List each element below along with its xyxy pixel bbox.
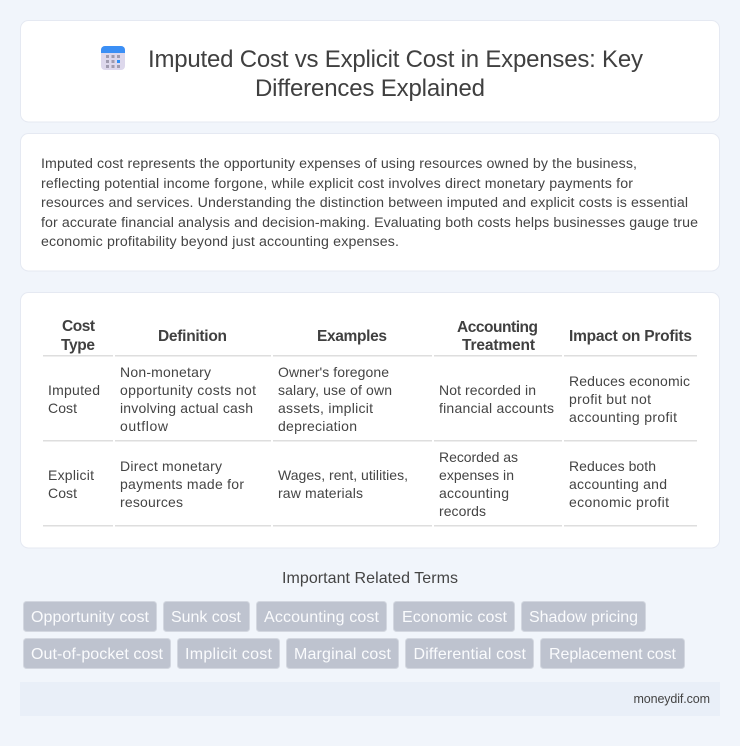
- panel: summary paragraph: [20, 134, 720, 271]
- text block: summary: economic profitability beyond just accounting expenses.: [41, 234, 399, 250]
- tag list: related terms: Sunk cost: [171, 609, 242, 626]
- table row: explicit cost: resources: [120, 494, 183, 510]
- heading: important related terms: Important Related Terms: [282, 570, 458, 587]
- table row: imputed cost: Owner's foregone: [278, 364, 389, 380]
- table header row: Examples: [317, 328, 387, 345]
- table row: imputed cost: profit but not: [569, 391, 651, 407]
- tag list: related terms: Accounting cost: [264, 609, 380, 626]
- table row: explicit cost: raw materials: [278, 485, 363, 501]
- table header row: Definition: [158, 328, 227, 345]
- table header row: [61, 318, 692, 354]
- title: Imputed Cost vs Explicit Cost in Expenses: Key: [148, 46, 643, 73]
- table row: explicit cost: accounting: [439, 485, 509, 501]
- title: [148, 46, 643, 102]
- table row: explicit cost: economic profit: [569, 494, 669, 510]
- table row: explicit cost: Reduces both: [569, 458, 656, 474]
- table row: imputed cost: accounting profit: [569, 409, 677, 425]
- table header row: Accounting: [457, 319, 538, 336]
- table header row: Type: [61, 337, 95, 354]
- table row: imputed cost: financial accounts: [439, 400, 554, 416]
- table row: imputed cost: Cost: [48, 400, 77, 416]
- text block: summary: resources and services. Understanding the distinction between imputed and explicit costs is essential: [41, 195, 688, 211]
- tag list: related terms: Out-of-pocket cost: [31, 646, 164, 663]
- tag list: related terms: Marginal cost: [294, 646, 392, 663]
- table row: explicit cost: Explicit: [48, 467, 94, 483]
- table row: explicit cost: accounting and: [569, 476, 667, 492]
- table row: imputed cost: involving actual cash: [120, 400, 253, 416]
- table row: imputed cost: Not recorded in: [439, 382, 536, 398]
- text block: summary: for accurate financial analysis and decision-making. Evaluating both costs helps businesses gauge true: [41, 215, 698, 231]
- text block: summary: reflecting potential income forgone, while explicit cost involves direct monetary payments for: [41, 176, 633, 192]
- table row: explicit cost: Recorded as: [439, 449, 518, 465]
- table row: explicit cost: expenses in: [439, 467, 514, 483]
- tag list: related terms: Differential cost: [414, 646, 527, 663]
- footer bar: [20, 682, 720, 716]
- table header row: Cost: [62, 318, 95, 335]
- panel: title card: [20, 20, 720, 122]
- table row: imputed cost: assets, implicit: [278, 400, 373, 416]
- table row: imputed cost: salary, use of own: [278, 382, 392, 398]
- text block: summary: [41, 156, 698, 250]
- tag list: related terms: Implicit cost: [185, 646, 273, 663]
- tag list: related terms: [24, 602, 684, 668]
- tag list: related terms: Replacement cost: [549, 646, 677, 663]
- table row: imputed cost: Reduces economic: [569, 373, 690, 389]
- panel: comparison table: [20, 292, 720, 548]
- table row: explicit cost: records: [439, 503, 486, 519]
- tag list: related terms: Opportunity cost: [31, 609, 150, 626]
- table row: explicit cost: payments made for: [120, 476, 244, 492]
- table row: imputed cost: Imputed: [48, 382, 100, 398]
- text block: summary: Imputed cost represents the opportunity expenses of using resources owned by the business,: [41, 156, 637, 172]
- table row: explicit cost: Cost: [48, 485, 77, 501]
- table row: imputed cost: opportunity costs not: [120, 382, 256, 398]
- table row: explicit cost: Wages, rent, utilities,: [278, 467, 408, 483]
- table row: explicit cost: Direct monetary: [120, 458, 222, 474]
- table header row: Impact on Profits: [569, 328, 692, 345]
- table row: explicit cost: [48, 449, 669, 519]
- table row: imputed cost: Non-monetary: [120, 364, 211, 380]
- tag list: related terms: Shadow pricing: [529, 609, 638, 626]
- title: Differences Explained: [255, 75, 485, 102]
- footer bar: moneydif.com: [634, 692, 710, 706]
- table row: imputed cost: outflow: [120, 418, 169, 434]
- table row: imputed cost: depreciation: [278, 418, 357, 434]
- tag list: related terms: Economic cost: [402, 609, 508, 626]
- icon: calendar: [101, 46, 125, 70]
- table row: imputed cost: [48, 364, 690, 434]
- table header row: Treatment: [462, 337, 535, 354]
